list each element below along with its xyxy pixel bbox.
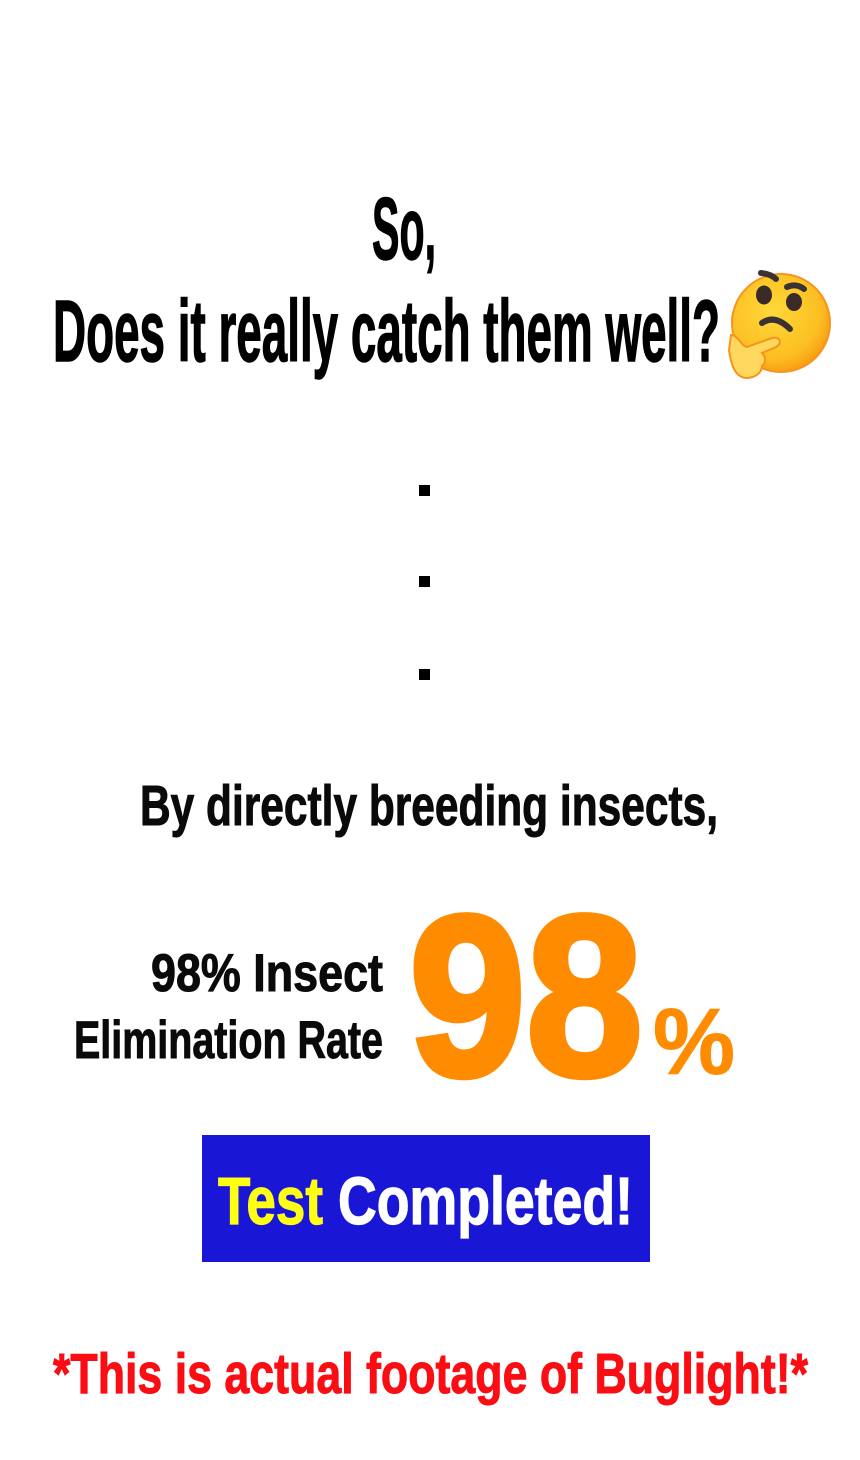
big number: 98%: % <box>653 989 735 1094</box>
badge: Test Completed!: Test <box>218 1164 323 1239</box>
label: 98% Insect Elimination Rate <box>74 944 383 1070</box>
badge: Test Completed! <box>202 1135 650 1262</box>
big number: 98%: 98 <box>409 868 643 1124</box>
label: 98% Insect Elimination Rate: 98% Insect <box>151 944 383 1003</box>
ellipsis dots <box>419 485 430 680</box>
badge: Test Completed!: Completed! <box>338 1164 633 1239</box>
label: 98% Insect Elimination Rate: Elimination Rate <box>74 1011 383 1070</box>
icon: thinking face emoji <box>729 273 830 378</box>
infographic canvas: So, <box>372 179 436 278</box>
